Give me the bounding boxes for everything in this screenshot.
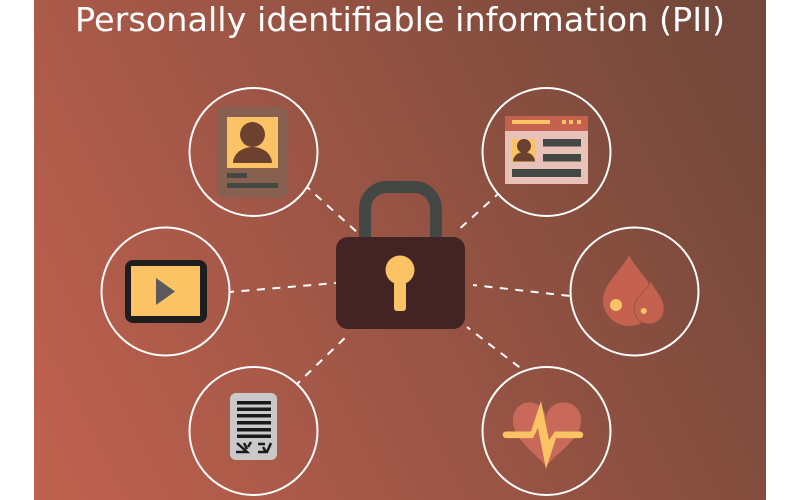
icon: ID window <box>505 116 588 184</box>
icon: document <box>230 393 277 460</box>
icon: video player <box>125 260 207 323</box>
icon: heart with pulse <box>503 401 583 469</box>
title: Personally identifiable information (PII) <box>75 0 725 39</box>
dashed connectors <box>230 187 570 384</box>
icon: contact card <box>217 107 288 198</box>
icon circles <box>102 88 698 495</box>
icon: padlock <box>336 187 465 329</box>
icon: blood drops <box>603 255 664 326</box>
